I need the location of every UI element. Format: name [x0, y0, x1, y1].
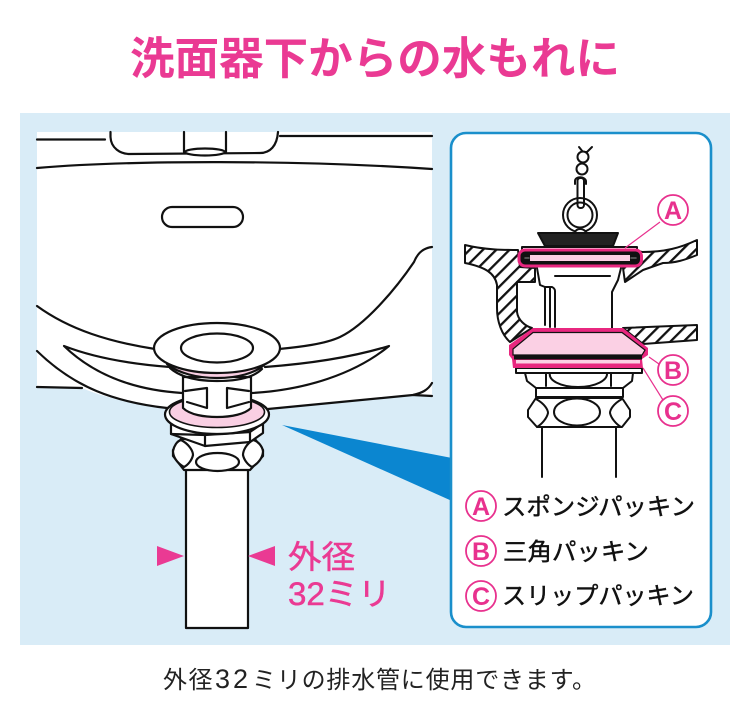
gasket A body — [522, 247, 637, 250]
legend B: 三角パッキン — [503, 539, 649, 566]
threaded body — [183, 377, 251, 417]
arrow: left width marker — [157, 546, 184, 566]
footer note: 外径 — [163, 667, 214, 694]
legend C: スリップパッキン — [502, 583, 694, 610]
title: 洗面器下からの水もれに — [130, 35, 620, 84]
illustration: cross section of drain — [465, 147, 697, 477]
marker A — [658, 195, 688, 225]
label: outer diameter: 外径 — [288, 539, 355, 575]
drain pipe — [186, 466, 248, 628]
label: outer diameter — [288, 539, 391, 612]
legend C: C — [472, 583, 490, 611]
marker A: A — [664, 197, 682, 225]
hatched basin left — [465, 245, 535, 342]
marker C: C — [664, 398, 682, 426]
arrow: right width marker — [248, 546, 275, 566]
white strip under slip gasket — [516, 368, 642, 373]
marker B — [658, 355, 688, 385]
lower nut — [171, 423, 263, 471]
drain body — [537, 268, 621, 328]
leader lines — [625, 222, 663, 400]
footer note: ミリの排水管に使用できます。 — [252, 667, 597, 694]
hatched basin right — [623, 240, 697, 282]
legend B: B — [472, 538, 490, 566]
legend A: スポンジパッキン — [502, 494, 695, 521]
panel: light blue background — [20, 113, 730, 645]
label: outer diameter: 32ミリ — [288, 576, 391, 612]
marker C — [658, 396, 688, 426]
footer note: 32 — [215, 664, 251, 694]
lower flange with pink gasket — [165, 395, 269, 434]
gasket A outline — [519, 250, 642, 266]
panel: detail view — [451, 133, 711, 627]
chain — [579, 147, 592, 152]
arrow: blue callout pointer — [282, 425, 452, 501]
upper flange — [154, 323, 280, 373]
legend A: A — [472, 493, 490, 521]
black stopper — [538, 233, 618, 246]
marker B: B — [664, 357, 682, 385]
lower nut stack — [542, 427, 616, 477]
upper flange underside pink — [167, 364, 264, 378]
illustration: sink and drain — [37, 132, 432, 628]
gasket B triangle packing — [509, 328, 648, 368]
